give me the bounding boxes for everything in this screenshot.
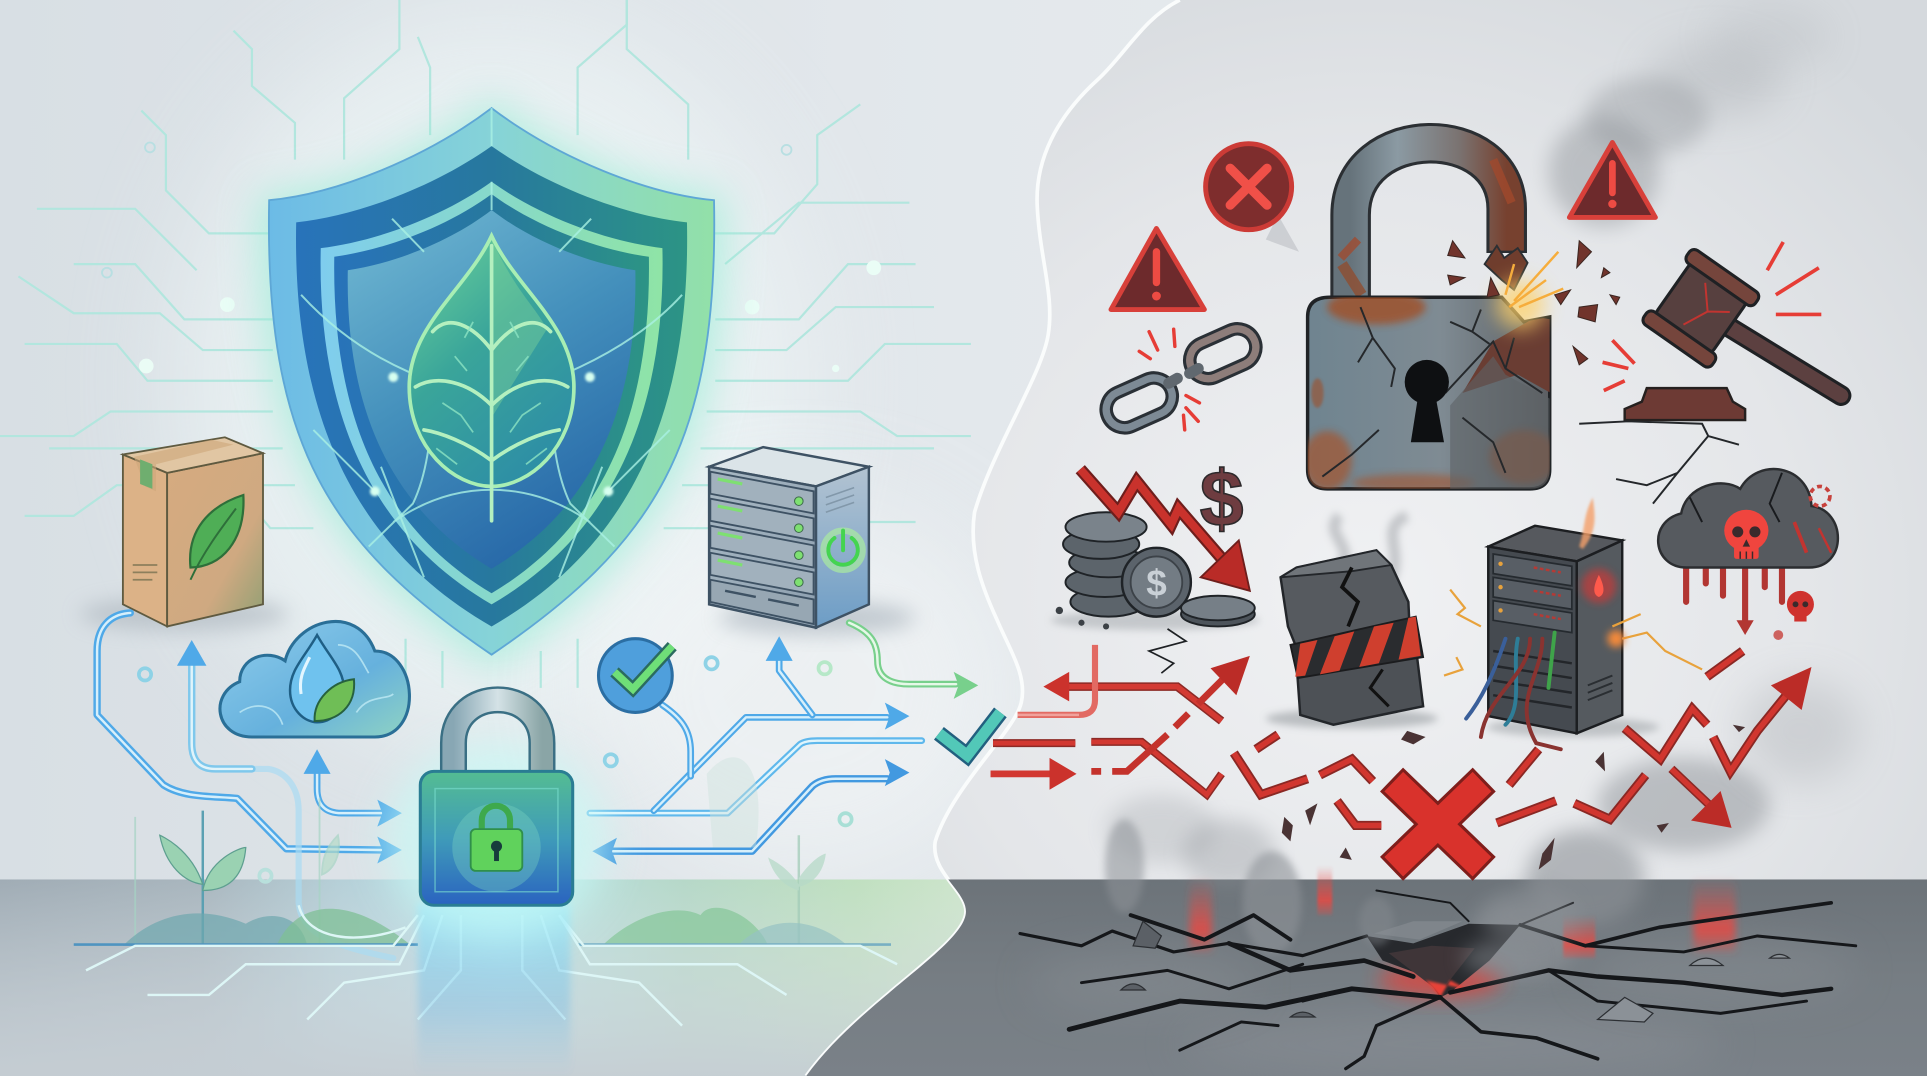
falling money: [1051, 455, 1260, 673]
gavel: head: [1641, 247, 1761, 369]
box: right face: [167, 453, 263, 626]
check circle: [599, 639, 672, 712]
server: power icon: [823, 531, 863, 570]
red arrow: lower right: [991, 758, 1077, 790]
circuit nodes: [102, 142, 881, 373]
block: lower: [1297, 626, 1423, 725]
server: top: [709, 447, 869, 486]
arrow: cloud and lock: [304, 749, 402, 827]
skull: [1724, 510, 1768, 559]
arrow: right upper: [654, 703, 909, 811]
right damaged side background: [787, 0, 1927, 1076]
flow arrows blue: [97, 613, 978, 958]
failing server: sparks: [1444, 590, 1702, 676]
plants right: [578, 757, 891, 946]
box: leaf: [190, 495, 244, 567]
red arrow: middle track: [993, 742, 1222, 795]
warning triangle left: [1111, 228, 1204, 310]
drop leaf: [315, 679, 354, 721]
gavel: [1579, 242, 1841, 504]
drips: [1686, 559, 1782, 620]
rusted padlock: body: [1308, 297, 1550, 489]
broken red arrows: [991, 645, 1811, 828]
box: top face: [123, 437, 263, 473]
failing server: flame: [1579, 497, 1595, 549]
light beam under padlock: [418, 903, 570, 1076]
arrow: up to server: [766, 636, 812, 715]
red arrow: rising dashed: [1091, 656, 1250, 771]
failing server: side: [1577, 540, 1622, 733]
failing server: wires: [1466, 633, 1561, 749]
failing server: front: [1488, 547, 1577, 733]
toxic skull cloud: [1658, 469, 1838, 640]
padlock: body: [420, 771, 573, 905]
shield: inner panel: [348, 210, 635, 569]
arrow: server green: [849, 623, 978, 699]
arrow: right lower two way: [592, 759, 909, 865]
block: upper: [1281, 550, 1410, 663]
coin stack: [1063, 512, 1148, 617]
red zigzag segments: [1234, 651, 1794, 825]
failing server: top: [1488, 526, 1622, 561]
gavel: red marks: [1603, 242, 1821, 391]
falling money: $: [1146, 563, 1167, 604]
ground: rocks: [1121, 921, 1789, 1022]
rusted broken padlock: [1303, 143, 1620, 491]
ground circuit traces: [86, 905, 897, 1026]
padlock: inner lock: [471, 806, 522, 871]
hazard tape: [1290, 617, 1423, 678]
falling arrow: [1080, 469, 1225, 563]
cracked ground: [1020, 866, 1856, 1069]
lock shards: [1448, 241, 1620, 365]
cloud body: [1658, 469, 1838, 567]
smoke wisps: [1334, 516, 1407, 583]
shield: dark band: [296, 146, 687, 626]
gavel: crack: [1579, 421, 1739, 504]
broken block with hazard tape: [1266, 516, 1438, 728]
shield: [269, 108, 714, 655]
shield: inner band: [334, 194, 649, 593]
server: side: [816, 467, 869, 628]
gavel: handle: [1721, 322, 1841, 396]
big red X: [1403, 791, 1472, 857]
padlock healthy: [386, 700, 607, 940]
cardboard box with leaf: [80, 437, 289, 631]
spark burst: [1496, 252, 1563, 329]
shield: leaf emblem: [409, 236, 574, 521]
background: left side glow: [172, 12, 1008, 872]
ground: central chasm: [1367, 924, 1520, 997]
ground: rising smoke: [1359, 886, 1579, 975]
broken chain: [1100, 323, 1262, 434]
box: left face: [123, 454, 167, 626]
shield: light band: [321, 182, 663, 604]
small ring nodes: [139, 657, 852, 882]
shield glow: [258, 98, 725, 669]
big coin: [1122, 548, 1191, 617]
chain: red sparks: [1139, 329, 1199, 430]
shield: outer rim: [269, 108, 714, 655]
small skull: [1787, 591, 1814, 622]
gavel: base: [1625, 388, 1745, 420]
dollar sign: $: [1200, 455, 1243, 543]
error circle: [1206, 144, 1299, 252]
failing server: [1444, 497, 1702, 749]
warning triangle right: [1569, 142, 1655, 217]
rusted padlock: keyhole: [1405, 360, 1449, 442]
red arrow: left pointing: [1018, 645, 1222, 721]
red arrow: down right: [1671, 769, 1732, 828]
ground: crack lines: [1020, 891, 1856, 1069]
left floor: [0, 879, 1008, 1076]
plants left: [74, 798, 418, 946]
debris shards: [1282, 725, 1745, 870]
rusted padlock: shackle: [1351, 143, 1507, 301]
arrow: box to lock: [97, 613, 402, 864]
flat coin: [1181, 602, 1255, 626]
padlock: shackle: [453, 700, 542, 780]
drop: [290, 635, 344, 722]
arrow: up to box: [177, 640, 393, 958]
server: front: [709, 467, 816, 628]
big check mark: [939, 712, 1000, 755]
ground: red glows: [1190, 866, 1735, 997]
arrow: right middle: [590, 741, 922, 813]
smoke clouds: [1105, 6, 1859, 979]
server rack healthy: [709, 447, 916, 635]
circuit traces behind shield: [0, 0, 971, 688]
water cloud: [220, 621, 409, 737]
server: slots: [710, 472, 814, 624]
shield: network lines: [301, 108, 682, 577]
